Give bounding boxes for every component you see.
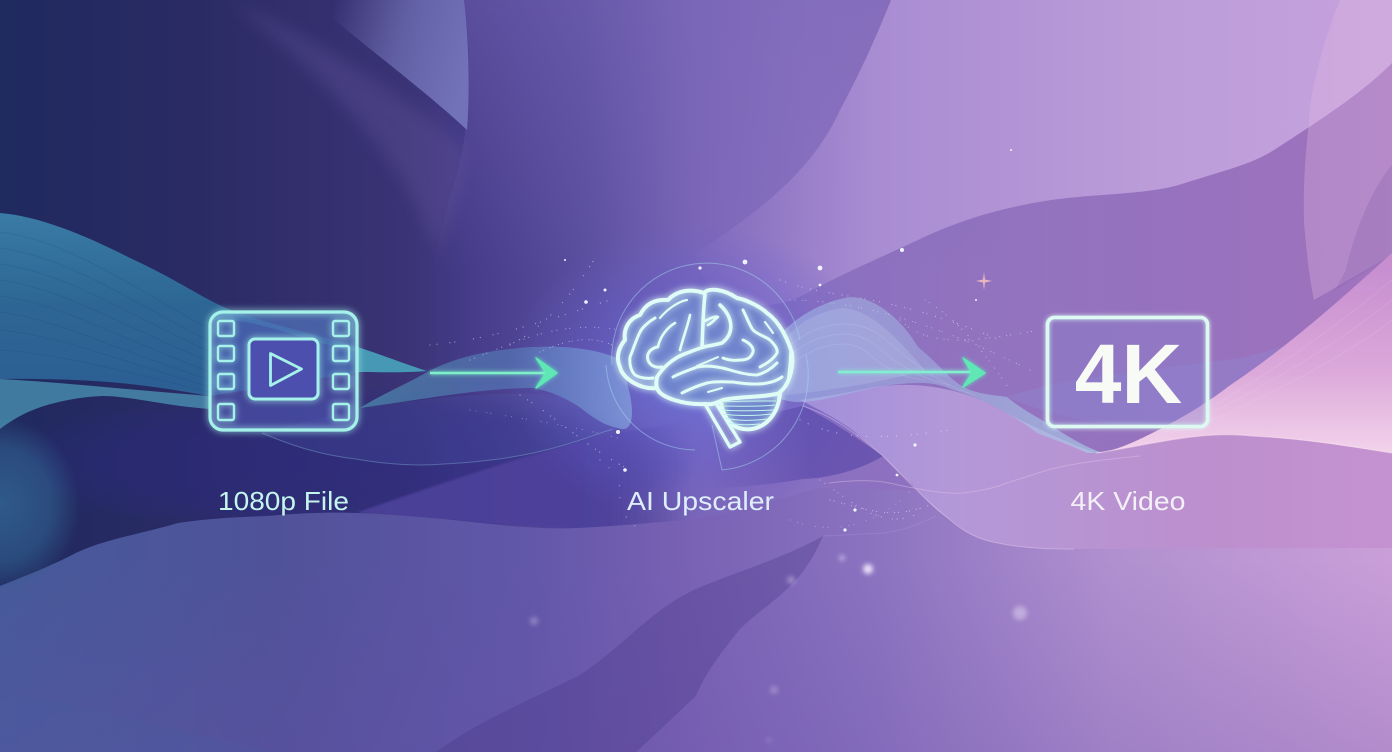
- right mesh waves: [696, 253, 1392, 549]
- particle field: [430, 250, 1040, 530]
- label: 1080p File: 1080p File: [218, 486, 349, 516]
- arrow: file to upscaler: [430, 358, 557, 388]
- dark central band: [0, 387, 700, 537]
- bokeh lights: [530, 555, 1027, 743]
- icon: glowing AI brain: [606, 263, 808, 470]
- upper-right large light panel: [696, 0, 1392, 305]
- top-right vertical ribbon: [1304, 0, 1392, 300]
- icon: 4K badge: [1048, 318, 1208, 426]
- label: AI Upscaler: AI Upscaler: [627, 486, 774, 516]
- left teal haze: [0, 415, 80, 590]
- halo behind brain: [505, 225, 885, 525]
- icon: film strip with play button: [210, 312, 357, 430]
- top-left translucent arc: [230, 0, 1000, 270]
- lower band: [0, 488, 1392, 752]
- 4K text: 4K: [1075, 327, 1182, 421]
- mid purple wedge: [356, 420, 700, 535]
- label: 4K Video: 4K Video: [1070, 486, 1186, 516]
- arrow: upscaler to 4K: [838, 358, 985, 387]
- left mesh waves: [0, 213, 632, 465]
- sparkle star: [976, 272, 992, 290]
